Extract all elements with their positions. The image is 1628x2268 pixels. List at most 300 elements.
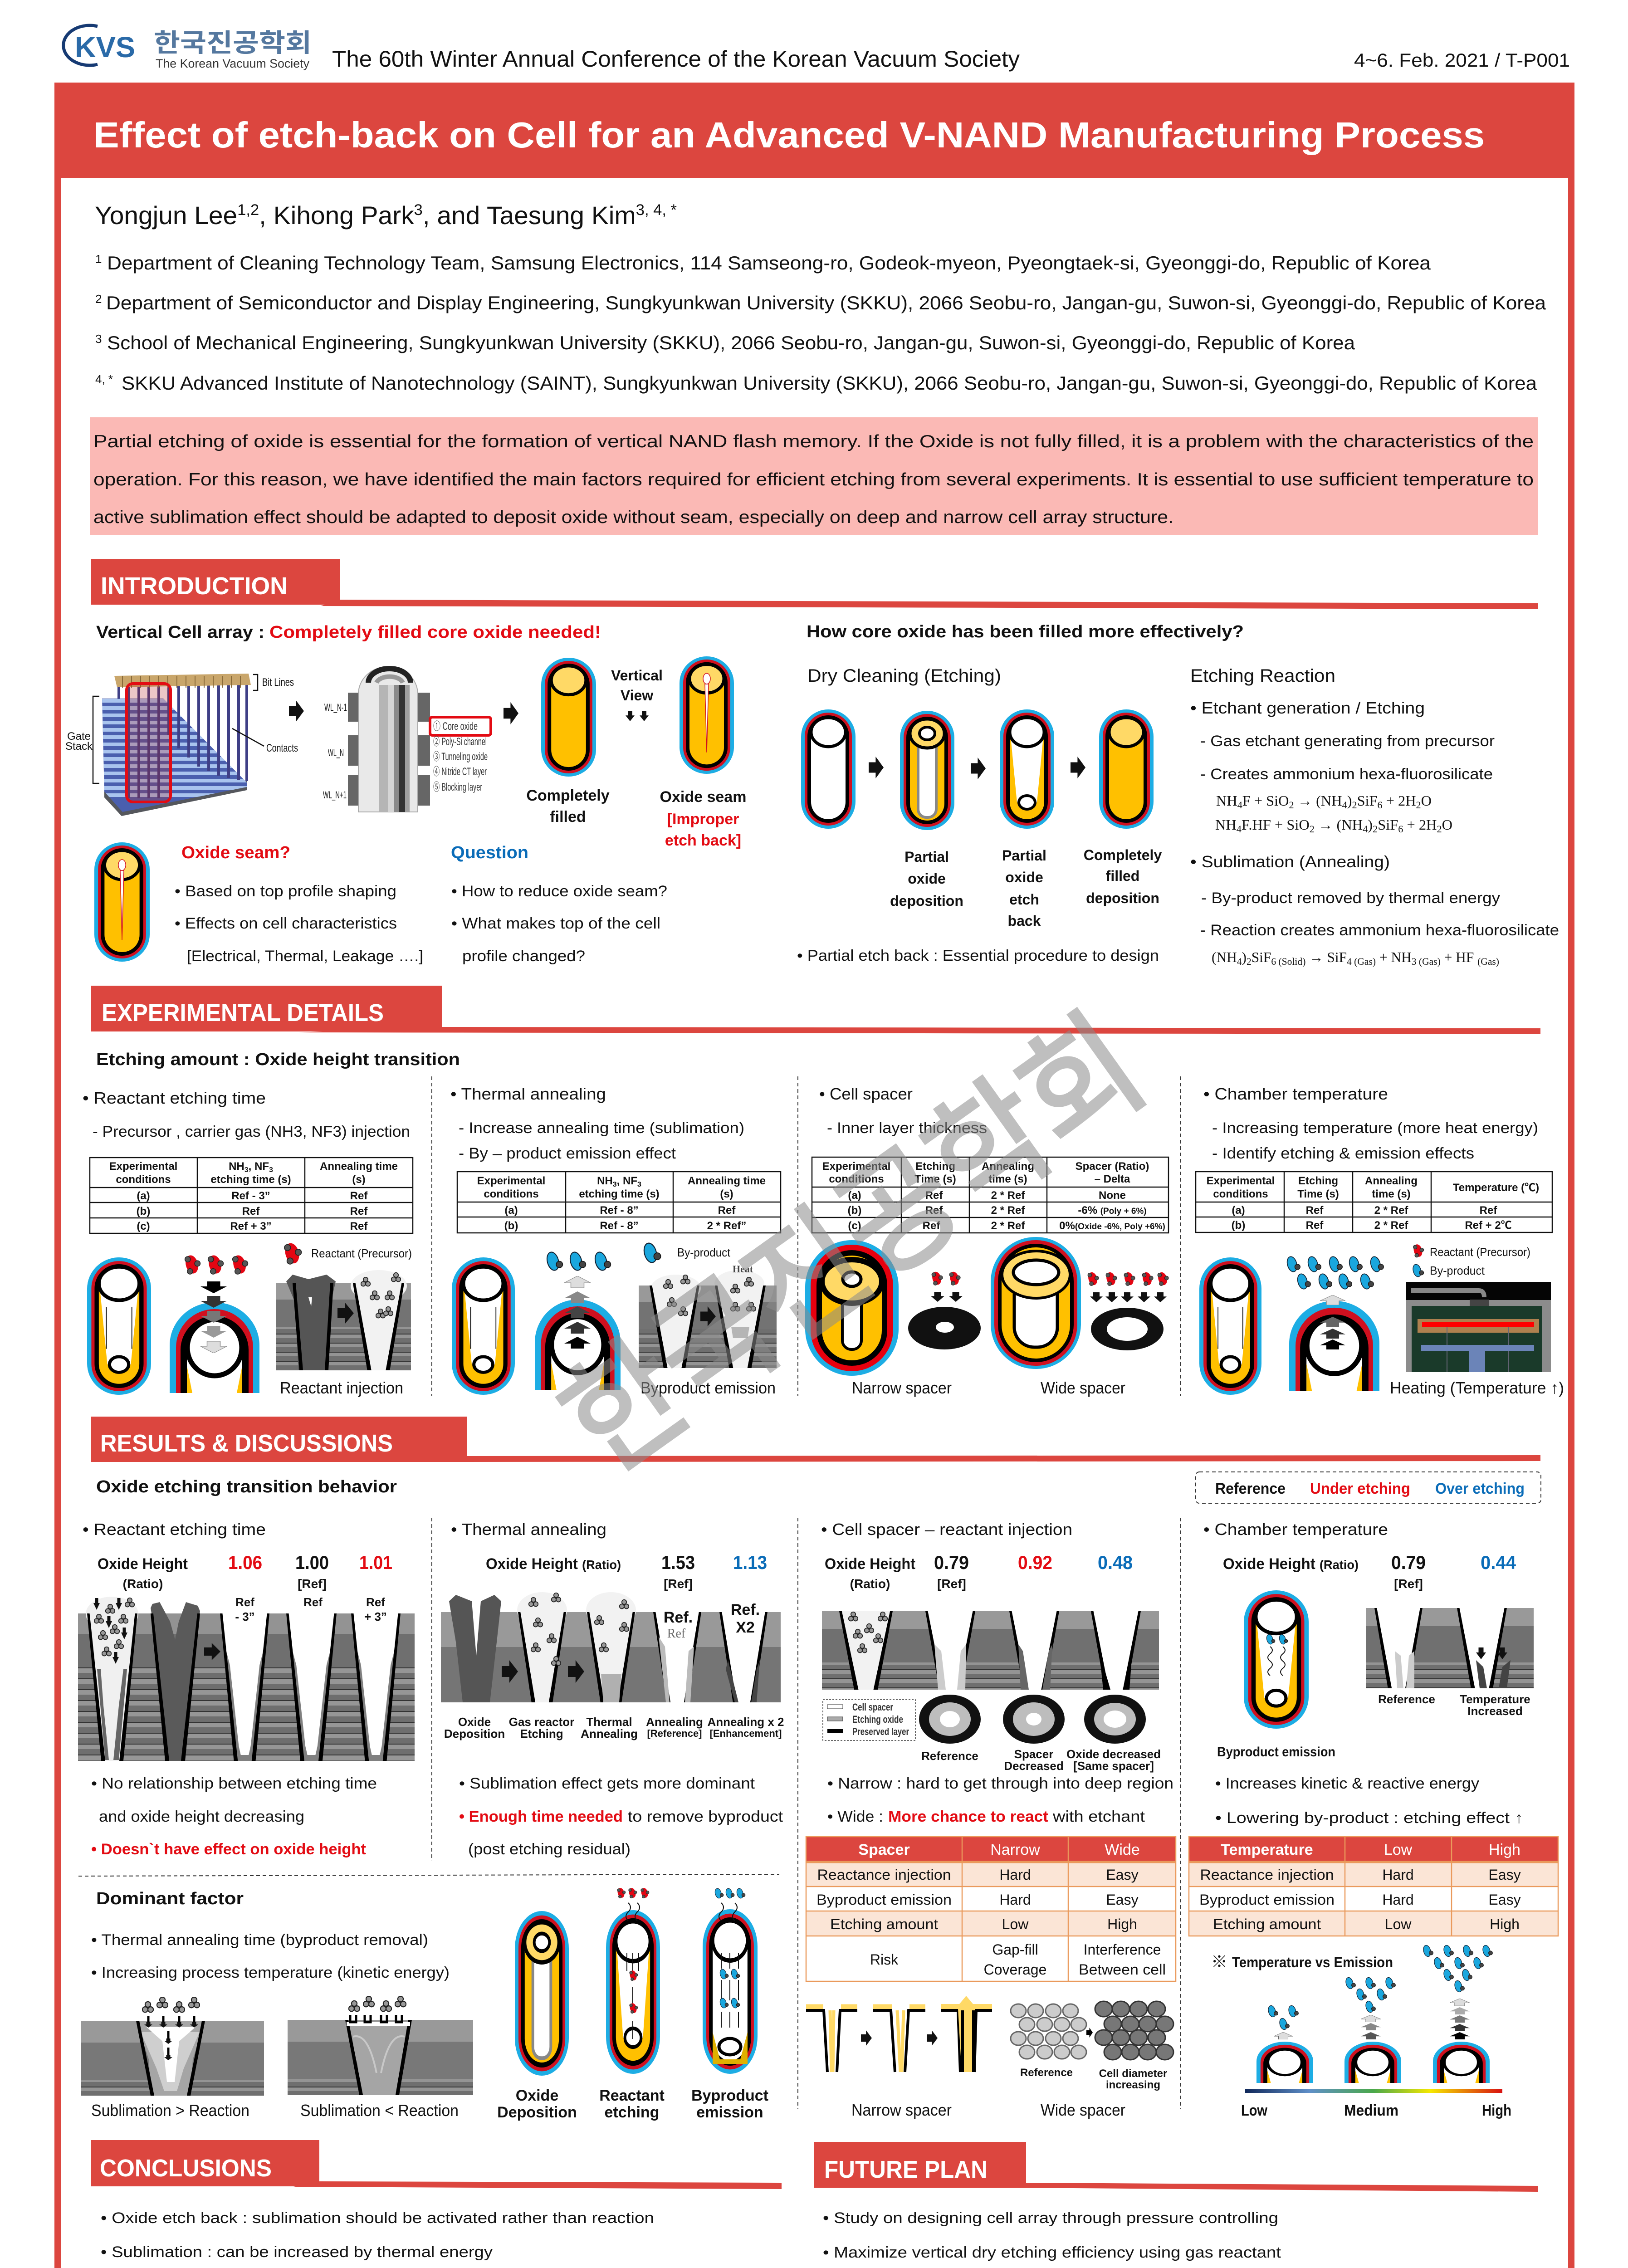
step captions <box>444 1715 784 1740</box>
affiliations <box>95 252 1546 394</box>
axis labels: High <box>1482 2102 1511 2119</box>
formula 1: → (NH <box>1294 792 1342 809</box>
logo emblem <box>64 25 135 65</box>
panel: exp thermal annealing: • Thermal annealing <box>450 1085 606 1103</box>
figure: reactant injection trench <box>276 1270 411 1370</box>
panel: exp reactant etching time: - Precursor , carrier gas (NH3, NF3) injection <box>93 1123 410 1140</box>
formula 3: + NH <box>1376 949 1412 965</box>
authors: , Kihong Park <box>259 201 415 230</box>
affiliation 3: 3 <box>95 332 102 346</box>
step labels: oxide <box>1005 869 1043 885</box>
table: (b) <box>504 1220 518 1232</box>
step labels: deposition <box>1086 890 1159 906</box>
abstract panel <box>90 417 1538 535</box>
table: spacer comparison: Byproduct emission <box>816 1892 952 1908</box>
step captions: Etching <box>520 1727 563 1740</box>
table: Time (s) <box>914 1173 956 1185</box>
table: temperature comparison <box>1189 1837 1558 1936</box>
vertical view label <box>611 667 663 721</box>
table: etching time (s) <box>210 1173 291 1186</box>
figure: cell cross-section <box>323 667 491 812</box>
step captions: Gas reactor <box>509 1715 574 1729</box>
affiliation 2: Department of Semiconductor and Display Engineering, Sungkyunkwan University (SKKU), 2066 Seobu-ro, Jangan-gu, Suwon-si, Gyeonggi-do, Republic of Korea <box>106 292 1546 313</box>
table: temperature comparison: Byproduct emission <box>1199 1892 1335 1908</box>
panel: dominant factor: • Thermal annealing time (byproduct removal) <box>91 1931 428 1949</box>
table: spacer comparison <box>806 1837 1176 1981</box>
panel: exp chamber temperature <box>1196 1085 1564 1397</box>
authors: 3 <box>414 201 423 219</box>
table: Ref <box>242 1205 260 1217</box>
table: temperature comparison: Low <box>1384 1841 1413 1858</box>
spacer captions: increasing <box>1106 2079 1160 2091</box>
table: (c) <box>137 1220 150 1232</box>
table: spacer comparison: Coverage <box>984 1961 1046 1978</box>
captions: Narrow spacer <box>852 1378 952 1397</box>
table: (b) <box>848 1204 861 1217</box>
ring captions <box>921 1747 1161 1773</box>
table: spacer comparison: High <box>1107 1916 1137 1932</box>
table: temperature comparison: High <box>1490 1916 1520 1932</box>
panel: exp chamber temperature: • Chamber temperature <box>1203 1085 1388 1103</box>
pillar: oxide seam: etch back] <box>665 832 741 849</box>
findings: ↑ <box>1515 1809 1523 1827</box>
pillar: completely filled: Completely <box>526 787 610 804</box>
table: Ref + 2℃ <box>1465 1219 1512 1232</box>
panel: results thermal annealing: • Thermal annealing <box>451 1520 606 1539</box>
table: Experimental <box>822 1160 890 1173</box>
table: 0%(Oxide -6%, Poly +6%) <box>1059 1220 1165 1232</box>
formula 3: 6 (Solid) <box>1271 956 1305 967</box>
oxide seam notes: Oxide seam? <box>181 843 290 862</box>
table: spacer comparison: Gap-fill <box>992 1941 1038 1958</box>
pillar: reactant etching: etching <box>605 2104 659 2121</box>
figure: byproduct emission trench: Heat <box>733 1263 753 1275</box>
formula 1: O <box>1421 792 1432 809</box>
panel: exp thermal annealing: - Increase annealing time (sublimation) <box>459 1119 744 1137</box>
formula 3: 4 <box>1237 956 1242 967</box>
layer list: ⑤ Blocking layer <box>433 781 482 793</box>
pillar: reactant etching: Reactant <box>599 2087 665 2104</box>
table: – Delta <box>1095 1173 1130 1185</box>
table: spacer comparison: Easy <box>1106 1867 1139 1883</box>
oxide height values: 0.79 <box>1391 1552 1426 1573</box>
trench captions <box>1378 1692 1530 1718</box>
table: time (s) <box>988 1173 1027 1185</box>
step captions: [Enhancement] <box>710 1728 782 1739</box>
panel: etching reaction <box>1190 666 1559 967</box>
formula 1: 4 <box>1342 799 1347 811</box>
reactant icons <box>184 1254 248 1275</box>
formula 2: 2 <box>1437 823 1442 835</box>
table: (c) <box>848 1220 861 1232</box>
figure: spacer trench <box>822 1611 1159 1690</box>
legend: layers: Preserved layer <box>852 1726 909 1737</box>
variation labels: Ref <box>303 1595 323 1609</box>
step labels <box>890 847 1162 929</box>
step labels: Partial <box>1002 847 1046 864</box>
chart title: ※ <box>1211 1952 1227 1971</box>
panel: etching reaction: • Etchant generation / Etching <box>1190 699 1425 717</box>
step labels: Partial <box>904 849 949 865</box>
oxide height values: Oxide Height <box>98 1555 188 1573</box>
table: NH <box>597 1175 613 1187</box>
spacer captions: Wide spacer <box>1041 2101 1125 2119</box>
oxide seam notes: • Effects on cell characteristics <box>175 915 397 932</box>
abstract panel: operation. For this reason, we have identified the main factors required for efficient etching from several experiments. It is essential to use sufficient temperature to <box>93 470 1534 489</box>
question notes: Question <box>451 843 528 862</box>
table: 3 <box>244 1166 249 1174</box>
caption: Heating (Temperature ↑) <box>1390 1378 1564 1397</box>
section: results and discussions heading: RESULTS & DISCUSSIONS <box>100 1430 393 1457</box>
byproduct icons <box>545 1251 611 1271</box>
table: spacer comparison: Interference <box>1084 1941 1161 1958</box>
header: KVS logo <box>64 25 312 70</box>
findings <box>91 1775 377 1858</box>
chart title: Temperature vs Emission <box>1232 1954 1393 1970</box>
table: conditions <box>484 1188 539 1200</box>
step labels: Completely <box>1084 847 1162 863</box>
step labels: filled <box>1106 868 1139 884</box>
formula 1: NH <box>1216 792 1237 809</box>
wide spacer reactant flow <box>1087 1271 1168 1302</box>
trench captions: Increased <box>1467 1704 1523 1718</box>
findings <box>459 1775 783 1858</box>
affiliation 2: 2 <box>95 292 102 306</box>
table: conditions <box>1213 1188 1268 1200</box>
section: conclusions heading <box>91 2140 782 2189</box>
legend: layers: Cell spacer <box>852 1701 893 1713</box>
table <box>1196 1172 1552 1232</box>
step captions: Deposition <box>444 1727 505 1740</box>
table: NH <box>229 1160 244 1173</box>
chart: temperature vs emission <box>1211 1945 1511 2119</box>
figure: trench profile <box>78 1597 415 1761</box>
table: 2 * Ref <box>1374 1219 1408 1232</box>
table: Annealing <box>982 1160 1034 1173</box>
table: Temperature (℃) <box>1453 1182 1539 1194</box>
affiliation 1: Department of Cleaning Technology Team, Samsung Electronics, 114 Samseong-ro, Godeok-myeon, Pyeongtaek-si, Gyeonggi-do, Republic of Korea <box>107 252 1431 274</box>
table: temperature comparison: Easy <box>1488 1892 1521 1908</box>
pillar: oxide deposition: Oxide <box>516 2087 558 2104</box>
legend: layers: Etching oxide <box>852 1714 903 1725</box>
intro subtitle right: How core oxide has been filled more effectively? <box>807 622 1244 641</box>
legend: etching type: Under etching <box>1310 1480 1410 1497</box>
variation labels: X2 <box>736 1619 755 1636</box>
labels of the array: Stack <box>65 740 93 753</box>
etched pillar icon <box>452 1257 515 1395</box>
captions <box>852 1378 1125 1397</box>
results subtitle: Oxide etching transition behavior <box>96 1477 397 1496</box>
table: Ref + 3” <box>230 1220 272 1232</box>
table: temperature comparison: Hard <box>1382 1892 1414 1908</box>
panel: exp chamber temperature: - Increasing temperature (more heat energy) <box>1212 1119 1538 1137</box>
question notes <box>451 843 667 965</box>
oxide height values: 0.92 <box>1018 1552 1052 1573</box>
oxide height values: 1.13 <box>733 1552 767 1573</box>
figure: byproduct emission trench <box>639 1263 777 1368</box>
formula 2: 4 <box>1363 823 1368 835</box>
formula 2: ) <box>1368 816 1373 833</box>
panel: etching reaction: - Gas etchant generating from precursor <box>1200 733 1495 750</box>
zoomed pillar top <box>1289 1301 1379 1391</box>
step labels: deposition <box>890 893 963 909</box>
conclusions list: • Oxide etch back : sublimation should be activated rather than reaction <box>101 2209 654 2227</box>
legend: Reactant (Precursor) <box>1430 1245 1530 1259</box>
table: Etching <box>915 1160 955 1173</box>
step captions: Oxide <box>458 1715 491 1729</box>
findings: • Sublimation effect gets more dominant <box>459 1775 755 1792</box>
narrow spacer reactant flow <box>931 1271 963 1302</box>
table: Etching <box>1298 1175 1338 1187</box>
table: (a) <box>137 1190 150 1202</box>
figure: heating chamber <box>1406 1282 1551 1372</box>
ring captions: [Same spacer] <box>1073 1759 1154 1773</box>
panel: exp reactant etching time: • Reactant etching time <box>83 1089 266 1107</box>
intro subtitle left: Vertical Cell array : <box>96 623 264 642</box>
formula 3: + HF <box>1441 949 1477 965</box>
wide spacer pillar <box>991 1237 1081 1369</box>
findings: • No relationship between etching time <box>91 1775 377 1792</box>
section: introduction heading: INTRODUCTION <box>101 572 288 600</box>
table: time (s) <box>1372 1188 1411 1200</box>
logo emblem: KVS <box>75 31 135 64</box>
authors: 1,2 <box>237 201 259 219</box>
table: Ref - 8” <box>600 1204 639 1217</box>
section: conclusions heading: CONCLUSIONS <box>100 2155 272 2182</box>
spacer captions: Narrow spacer <box>851 2101 952 2119</box>
findings: (post etching residual) <box>468 1841 631 1858</box>
panel: results cell spacer <box>821 1520 1173 1825</box>
table: 2 * Ref” <box>707 1220 746 1232</box>
spacer captions: Reference <box>1020 2067 1073 2079</box>
figure captions <box>91 2101 459 2120</box>
trench captions: Reference <box>1378 1692 1435 1706</box>
step captions: Thermal <box>586 1715 632 1729</box>
arrows out of the pillar <box>564 1276 591 1349</box>
findings: More chance to react <box>888 1808 1048 1825</box>
legend: layers <box>823 1700 915 1740</box>
title: Effect of etch-back on Cell for an Advanced V-NAND Manufacturing Process <box>93 115 1485 155</box>
oxide height values: [Ref] <box>664 1577 693 1591</box>
table: Annealing time <box>688 1175 766 1187</box>
oxide height values: 1.01 <box>359 1552 392 1573</box>
table: spacer comparison: Spacer <box>858 1841 910 1858</box>
affiliation 1: 1 <box>95 252 102 266</box>
oxide height values: [Ref] <box>937 1577 966 1591</box>
table: (a) <box>848 1189 861 1202</box>
temperature colour bar <box>1245 2089 1502 2093</box>
table: Ref <box>925 1189 943 1202</box>
table: Annealing <box>1365 1175 1418 1187</box>
table: conditions <box>116 1173 171 1186</box>
legend: etching type: Over etching <box>1435 1480 1525 1497</box>
table: Ref - 3” <box>231 1190 270 1202</box>
question notes: profile changed? <box>462 948 585 965</box>
table: Annealing time <box>320 1160 398 1173</box>
formula 3: SiF <box>1252 949 1271 965</box>
formula 1: SiF <box>1357 792 1378 809</box>
spacer captions: Cell diameter <box>1099 2068 1167 2080</box>
layer list: ② Poly-Si channel <box>433 736 487 748</box>
table: spacer comparison: Between cell <box>1079 1961 1166 1978</box>
table: 2 * Ref <box>1374 1204 1408 1217</box>
table: spacer comparison: Reactance injection <box>817 1867 951 1883</box>
legend byproduct <box>642 1242 731 1264</box>
formula 3: → SiF <box>1305 949 1347 965</box>
table: temperature comparison: High <box>1489 1841 1520 1858</box>
question notes: • What makes top of the cell <box>451 915 660 932</box>
table: 2 * Ref <box>991 1189 1025 1202</box>
variation labels: Ref. <box>664 1609 693 1626</box>
table: 3 <box>269 1166 273 1174</box>
caption: Byproduct emission <box>640 1378 776 1397</box>
panel: results reactant etching time <box>78 1520 415 1858</box>
top-view rings <box>919 1695 1146 1744</box>
table: Ref <box>1306 1219 1324 1232</box>
formula 2: + 2H <box>1403 816 1437 833</box>
formula 2: 6 <box>1398 823 1403 835</box>
byproduct emission pillar <box>1217 1590 1335 1760</box>
step captions: Annealing <box>646 1715 703 1729</box>
section: experimental details heading <box>91 986 1540 1034</box>
pillar: oxide seam <box>660 656 746 849</box>
oxide height values: 1.00 <box>295 1552 329 1573</box>
variation labels: Ref <box>366 1595 385 1609</box>
table: Time (s) <box>1297 1188 1339 1200</box>
findings: • Lowering by-product : etching effect <box>1215 1809 1510 1827</box>
variation labels: Ref <box>235 1595 254 1609</box>
panel: exp reactant etching time <box>83 1089 413 1397</box>
pillar: oxide deposition <box>497 1911 577 2121</box>
panel: dominant factor: Dominant factor <box>96 1889 244 1908</box>
figure: sublimation greater than reaction <box>81 1997 264 2096</box>
panel: results chamber temperature: • Chamber temperature <box>1203 1520 1388 1539</box>
medium emission molecules <box>1344 1977 1395 2039</box>
labels of the array: Gate <box>67 730 91 743</box>
table: Spacer (Ratio) <box>1076 1160 1149 1173</box>
oxide height values: 0.44 <box>1481 1552 1516 1573</box>
panel: results thermal annealing <box>441 1520 784 1858</box>
panel: results chamber temperature <box>1203 1520 1534 1827</box>
figure: cell cross-section: WL_N+1 <box>323 789 347 801</box>
table: Ref <box>925 1204 943 1217</box>
formula 2: NH <box>1215 816 1236 833</box>
figure: cell cross-section: WL_N-1 <box>324 702 347 713</box>
table: spacer comparison: Low <box>1002 1916 1029 1932</box>
figure: temperature trench <box>1366 1608 1534 1688</box>
table: 2 * Ref <box>991 1204 1025 1217</box>
table: Ref <box>1306 1204 1324 1217</box>
figure captions: Sublimation > Reaction <box>91 2101 249 2120</box>
future plan list: • Study on designing cell array through pressure controlling <box>823 2209 1278 2227</box>
table: (b) <box>137 1205 150 1217</box>
table: Ref <box>923 1220 940 1232</box>
table: spacer comparison: Hard <box>999 1867 1031 1883</box>
etched pillar icon <box>1199 1257 1261 1395</box>
legend <box>1412 1243 1530 1278</box>
arrows out of pillar <box>1320 1295 1345 1349</box>
arrows into the pillar <box>200 1281 227 1353</box>
oxide height values <box>98 1552 392 1591</box>
section: experimental details heading: EXPERIMENTAL DETAILS <box>102 999 384 1026</box>
affiliation 4: SKKU Advanced Institute of Nanotechnology (SAINT), Sungkyunkwan University (SKKU), 2066 Seobu-ro, Jangan-gu, Suwon-si, Gyeonggi-do, Republic of Korea <box>122 372 1537 394</box>
panel: exp thermal annealing <box>450 1085 781 1397</box>
affiliation 3: School of Mechanical Engineering, Sungkyunkwan University (SKKU), 2066 Seobu-ro, Jangan-gu, Suwon-si, Gyeonggi-do, Republic of Korea <box>107 332 1355 353</box>
findings: • Narrow : hard to get through into deep region <box>827 1775 1173 1792</box>
table: Ref <box>1480 1204 1497 1217</box>
formula 2: F.HF + SiO <box>1242 816 1310 833</box>
formula 1: 6 <box>1378 799 1383 811</box>
table <box>457 1172 781 1233</box>
table: Ref <box>350 1220 368 1232</box>
intro subtitle left <box>96 623 601 642</box>
abstract panel: active sublimation effect should be adapted to deposit oxide without seam, especially on deep and narrow cell array structure. <box>93 508 1173 527</box>
etched pillar icon <box>87 1257 151 1395</box>
panel: etching reaction: • Sublimation (Annealing) <box>1190 852 1390 871</box>
table: (a) <box>1232 1204 1245 1217</box>
oxide height values: 1.06 <box>228 1552 262 1573</box>
formula 3: 3 (Gas) <box>1412 956 1441 967</box>
table: 2 * Ref <box>991 1220 1025 1232</box>
figure: cell cross-section: WL_N <box>328 747 344 758</box>
pillar: completely filled <box>526 658 610 826</box>
oxide seam notes: • Based on top profile shaping <box>175 883 396 900</box>
caption: Reactant injection <box>280 1378 403 1397</box>
section: introduction heading <box>91 559 1538 609</box>
table: (s) <box>720 1188 733 1200</box>
oxide height values: 0.79 <box>934 1552 969 1573</box>
formula 1: + 2H <box>1383 792 1416 809</box>
findings <box>827 1775 1173 1825</box>
legend: etching type: Reference <box>1215 1480 1286 1497</box>
legend reactant <box>283 1242 412 1265</box>
panel: dry cleaning: Dry Cleaning (Etching) <box>807 666 1001 686</box>
table: (a) <box>504 1204 518 1217</box>
oxide seam notes: [Electrical, Thermal, Leakage ….] <box>187 948 423 965</box>
authors: 3, 4, * <box>636 201 677 219</box>
trench captions: Temperature <box>1460 1692 1530 1706</box>
conclusions list <box>101 2209 666 2268</box>
wide spacer donut <box>1091 1308 1164 1350</box>
panel: dominant factor <box>81 1887 768 2121</box>
variation labels: - 3” <box>235 1610 255 1623</box>
formula 1: 4 <box>1237 799 1242 811</box>
abstract panel: Partial etching of oxide is essential for the formation of vertical NAND flash memory. If the Oxide is not fully filled, it is a problem with the characteristics of the <box>93 432 1534 451</box>
section: future plan heading: FUTURE PLAN <box>824 2156 988 2183</box>
table: 3 <box>637 1181 641 1188</box>
ring captions: Spacer <box>1014 1747 1053 1761</box>
conference name: The 60th Winter Annual Conference of the Korean Vacuum Society <box>332 46 1020 72</box>
step captions: Annealing x 2 <box>707 1715 784 1729</box>
panel: exp thermal annealing: - By – product emission effect <box>459 1145 676 1162</box>
figure: sublimation less than reaction <box>288 1996 473 2095</box>
logo English name: The Korean Vacuum Society <box>156 57 309 70</box>
table: temperature comparison: Hard <box>1382 1867 1414 1883</box>
intro subtitle left: Completely filled core oxide needed! <box>269 623 601 642</box>
future plan list <box>823 2209 1281 2261</box>
variation labels <box>235 1595 387 1623</box>
axis labels <box>1241 2102 1511 2119</box>
table: , NF <box>617 1175 637 1187</box>
formula 2: 4 <box>1237 823 1242 835</box>
step captions: Annealing <box>581 1727 638 1740</box>
table: Ref <box>718 1204 736 1217</box>
figure captions: Sublimation < Reaction <box>300 2101 459 2120</box>
table: spacer comparison: Wide <box>1105 1841 1140 1858</box>
spacer captions <box>851 2067 1167 2119</box>
variation labels: Ref <box>667 1627 686 1641</box>
layer list: ③ Tunneling oxide <box>433 751 488 763</box>
